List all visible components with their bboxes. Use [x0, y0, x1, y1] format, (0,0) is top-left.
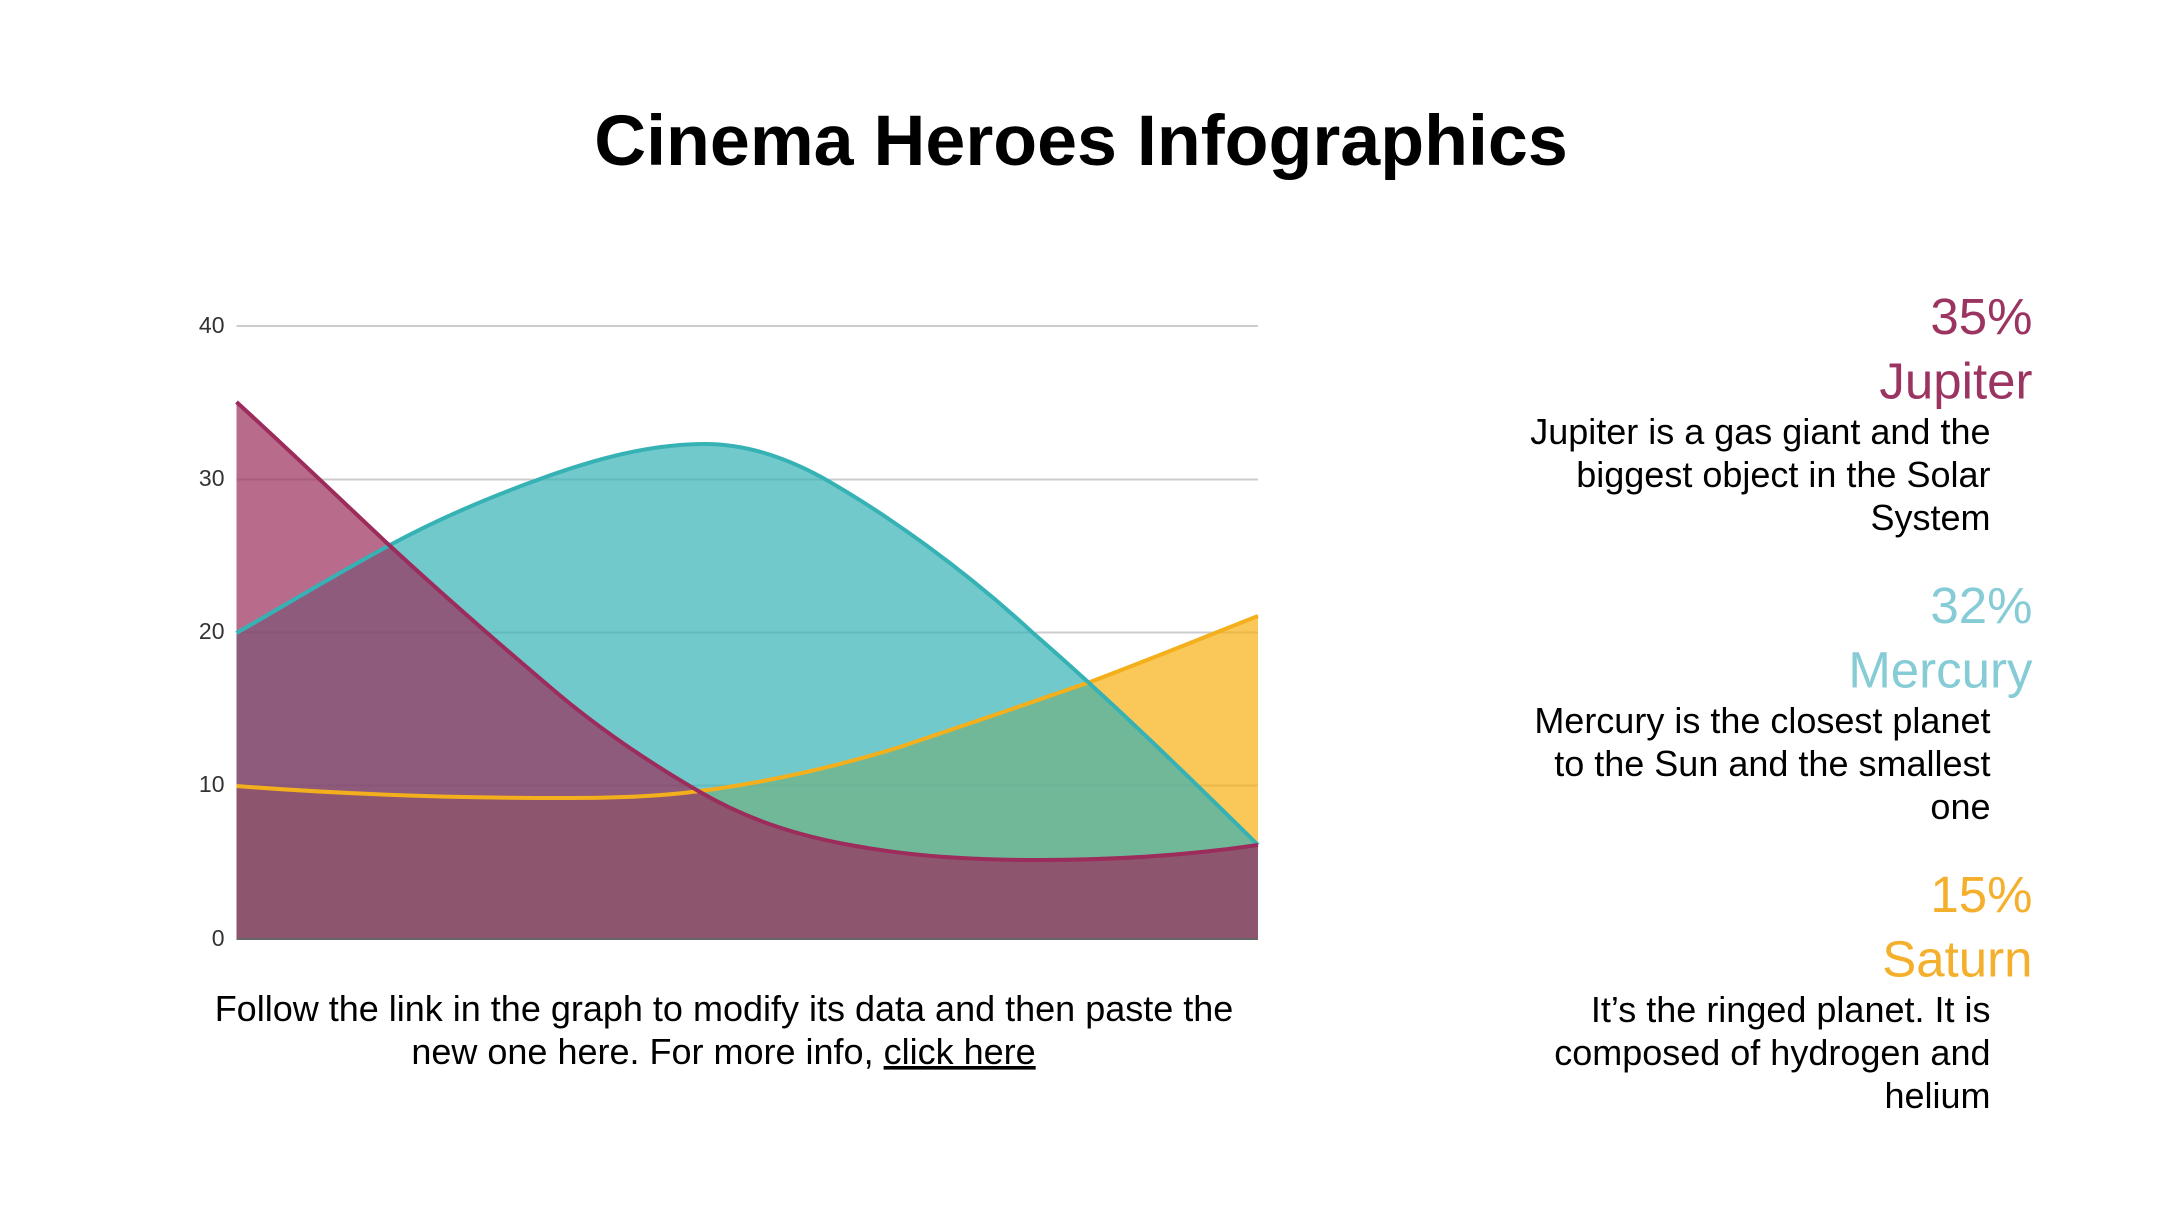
Saturn description: It’s the ringed planet. It is	[1591, 989, 1990, 1030]
Mercury name: Mercury	[1848, 642, 2033, 698]
Mercury description	[1534, 700, 1990, 827]
y axis labels	[199, 312, 224, 951]
Jupiter description	[1530, 411, 1991, 538]
caption	[215, 988, 1233, 1072]
panel: Saturn	[1554, 866, 2032, 1116]
y axis labels: 0	[212, 925, 224, 951]
y axis labels: 30	[199, 465, 224, 491]
line: Saturn	[236, 616, 1258, 798]
panel: Jupiter	[1530, 288, 2033, 538]
Jupiter description: Jupiter is a gas giant and the	[1530, 411, 1990, 452]
Mercury percentage: 32%	[1930, 577, 2032, 634]
panel: Mercury	[1534, 577, 2033, 827]
y axis labels: 20	[199, 618, 224, 644]
Jupiter description: biggest object in the Solar	[1576, 454, 1991, 495]
area: Jupiter	[236, 402, 1258, 939]
Jupiter percentage: 35%	[1930, 288, 2032, 345]
area: Mercury	[236, 444, 1258, 939]
line: Jupiter	[236, 402, 1258, 860]
Saturn percentage: 15%	[1930, 866, 2032, 923]
Mercury description: Mercury is the closest planet	[1534, 700, 1990, 741]
Saturn description: helium	[1884, 1075, 1990, 1116]
area: Saturn	[236, 616, 1258, 939]
baseline	[236, 938, 1258, 940]
Mercury description: to the Sun and the smallest	[1554, 743, 1990, 784]
Saturn name: Saturn	[1882, 930, 2032, 988]
caption: new one here. For more info, click here	[411, 1031, 1036, 1072]
line: Mercury	[236, 444, 1258, 845]
Jupiter description: System	[1870, 497, 1990, 538]
Mercury description: one	[1930, 786, 1990, 827]
panel: area chart	[199, 312, 1258, 951]
y axis labels: 10	[199, 771, 224, 797]
caption: Follow the link in the graph to modify its data and then paste the	[215, 988, 1233, 1029]
Jupiter name: Jupiter	[1879, 352, 2033, 410]
Saturn description	[1554, 989, 1990, 1116]
y axis labels: 40	[199, 312, 224, 338]
title: Cinema Heroes Infographics	[594, 101, 1568, 181]
grid lines	[236, 326, 1258, 786]
Saturn description: composed of hydrogen and	[1554, 1032, 1990, 1073]
